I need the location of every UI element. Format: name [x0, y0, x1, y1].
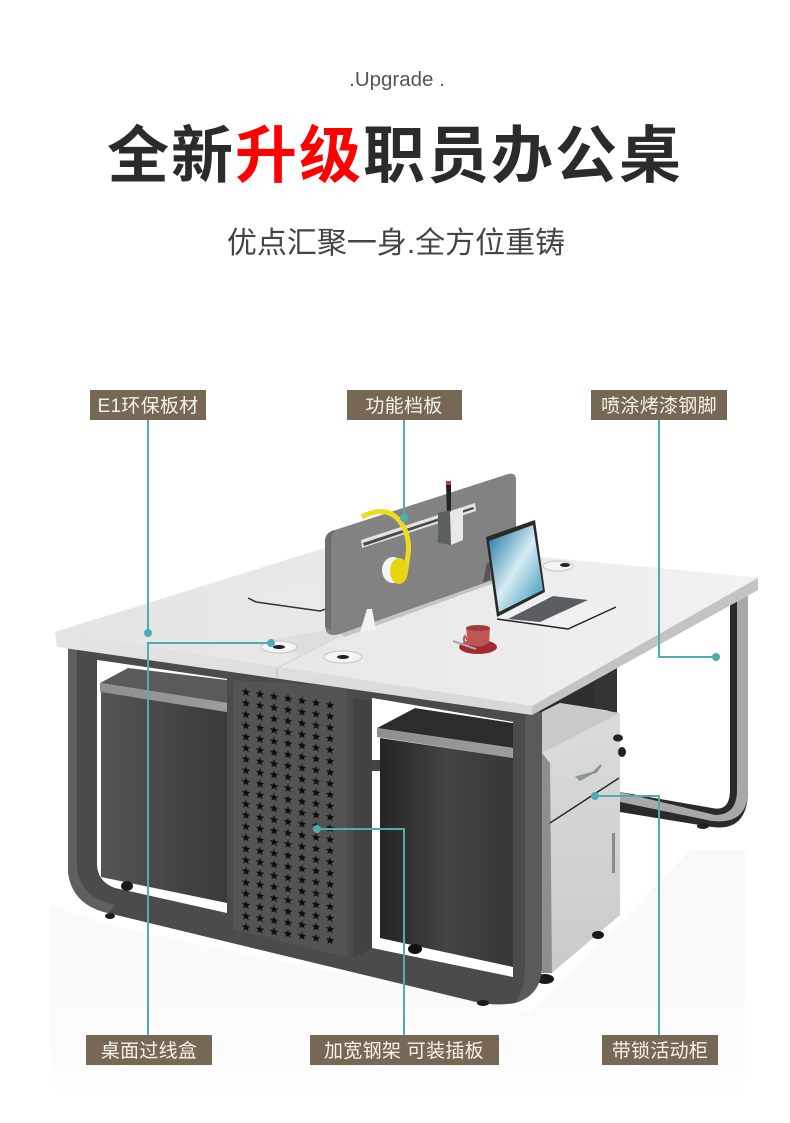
callout lines: [148, 418, 716, 1037]
pen holder: [438, 510, 451, 545]
tagline: 优点汇聚一身.全方位重铸: [227, 227, 565, 260]
mobile pedestal: right black: [372, 698, 513, 967]
headphones: [362, 512, 408, 575]
pencil: [446, 482, 451, 516]
mobile pedestal: left black: [97, 660, 227, 903]
back post: [595, 670, 617, 714]
label: 功能档板: [347, 390, 462, 420]
desk illustration: [55, 474, 758, 1006]
label: E1环保板材: E1环保板材: [97, 395, 199, 417]
label: 功能档板: 功能档板: [365, 395, 443, 417]
label: 桌面过线盒: 桌面过线盒: [101, 1040, 197, 1062]
title: 全新升级职员办公桌: [107, 122, 683, 191]
label: E1环保板材: [90, 390, 206, 420]
label: 带锁活动柜: [602, 1035, 718, 1065]
label: 喷涂烤漆钢脚: [591, 390, 727, 420]
subtitle: Upgrade: .Upgrade .: [349, 68, 445, 91]
back right leg: [620, 585, 748, 829]
label: 加宽钢架 可装插板: 加宽钢架 可装插板: [324, 1040, 484, 1062]
closed laptop: [248, 578, 326, 611]
cable grommets: [261, 561, 573, 663]
shadow on desk: [270, 630, 340, 655]
label: 加宽钢架 可装插板: [310, 1035, 499, 1065]
perforated panel: [233, 680, 372, 958]
desk top: [55, 539, 758, 715]
label: 桌面过线盒: [86, 1035, 212, 1065]
label: 带锁活动柜: 带锁活动柜: [612, 1040, 708, 1062]
divider screen: [325, 474, 516, 637]
feet: [105, 913, 489, 1006]
steel frame: [68, 645, 542, 1004]
floor reflection: [50, 850, 745, 1090]
paper holder: [450, 508, 463, 545]
rail: [361, 503, 476, 548]
coffee cup: [453, 625, 497, 654]
callout dots: [144, 514, 720, 833]
underside shadow: [532, 668, 617, 715]
mobile pedestal: grey: [536, 703, 626, 984]
right laptop: [486, 520, 616, 629]
label: 喷涂烤漆钢脚: 喷涂烤漆钢脚: [601, 395, 717, 417]
